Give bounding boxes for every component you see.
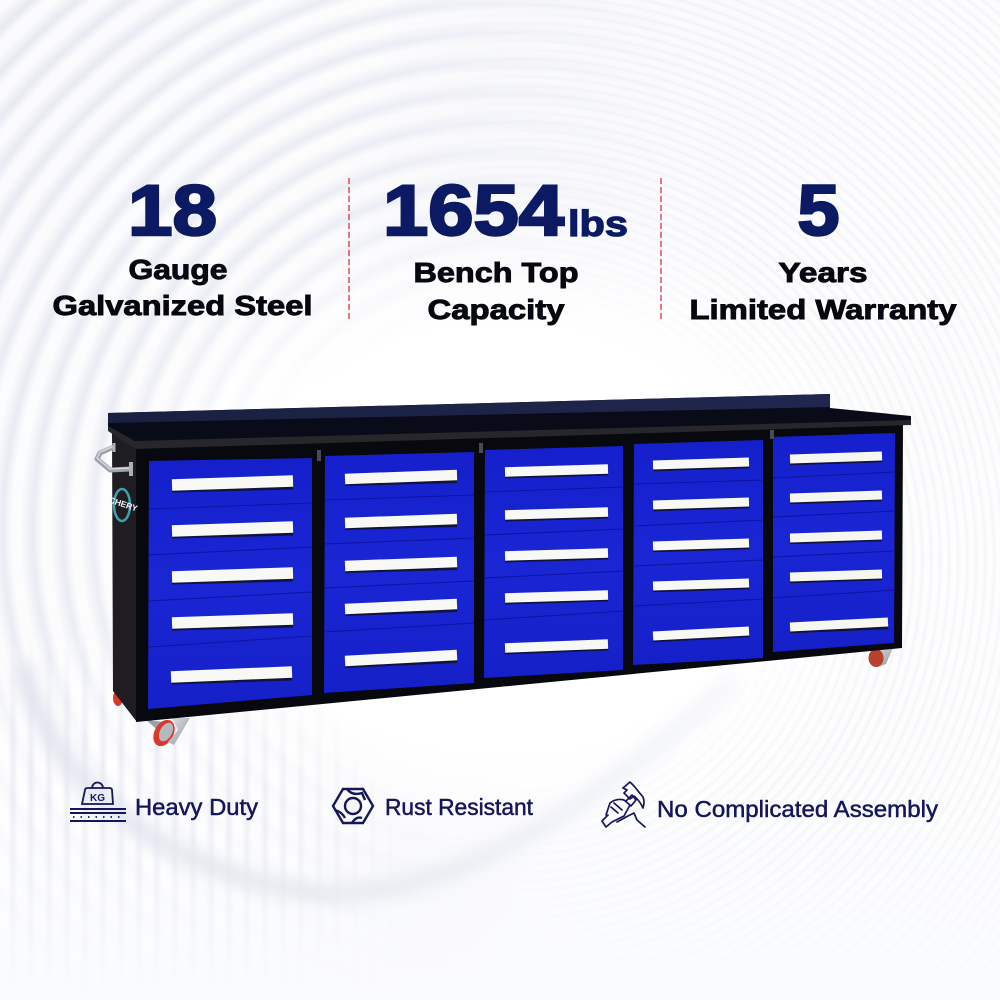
logo on side xyxy=(108,489,139,521)
divider xyxy=(348,178,350,322)
logo on side: CHERY xyxy=(108,495,139,513)
worktop xyxy=(108,394,911,449)
label: Bench Top Capacity: Bench Top xyxy=(414,257,578,288)
label: Years Limited Warranty: Limited Warranty xyxy=(690,294,957,325)
icon: hand with hammer xyxy=(602,782,645,827)
cabinet side panel xyxy=(112,432,137,722)
number 1654: 1654 xyxy=(383,172,565,251)
stat: 5 years xyxy=(690,172,957,325)
icon: hex nut xyxy=(333,789,373,823)
drawer column 1 xyxy=(148,458,312,709)
background: concentric swirl xyxy=(0,0,754,838)
drawer column 5 xyxy=(773,433,895,652)
locks xyxy=(317,430,774,461)
casters xyxy=(113,648,893,750)
workbench cabinet xyxy=(97,394,911,750)
stat: 1654 lbs xyxy=(383,172,628,325)
feature: Heavy Duty: Heavy Duty xyxy=(135,794,259,820)
label: Gauge Galvanized Steel xyxy=(52,254,312,321)
unit lbs: lbs xyxy=(568,203,628,244)
icon: weight xyxy=(70,783,126,821)
label: Years Limited Warranty xyxy=(690,257,957,325)
icon: weight: KG xyxy=(90,793,105,804)
label: Gauge Galvanized Steel: Galvanized Steel xyxy=(52,290,312,321)
drawer column 3 xyxy=(484,446,623,678)
side handle xyxy=(97,443,131,476)
feature: Rust Resistant: Rust Resistant xyxy=(385,794,534,820)
stat: 18 gauge xyxy=(52,172,312,321)
drawer column 2 xyxy=(324,452,474,693)
divider xyxy=(660,178,662,322)
label: Years Limited Warranty: Years xyxy=(778,257,868,288)
number 18: 18 xyxy=(128,172,217,251)
label: Bench Top Capacity: Capacity xyxy=(428,294,565,325)
feature: No Complicated Assembly: No Complicated Assembly xyxy=(657,796,939,822)
drawer column 4 xyxy=(633,440,763,665)
label: Gauge Galvanized Steel: Gauge xyxy=(128,254,228,285)
label: Bench Top Capacity xyxy=(414,257,578,325)
cabinet front frame xyxy=(136,424,903,722)
number 5: 5 xyxy=(798,172,840,251)
background bowl shading xyxy=(22,665,735,893)
